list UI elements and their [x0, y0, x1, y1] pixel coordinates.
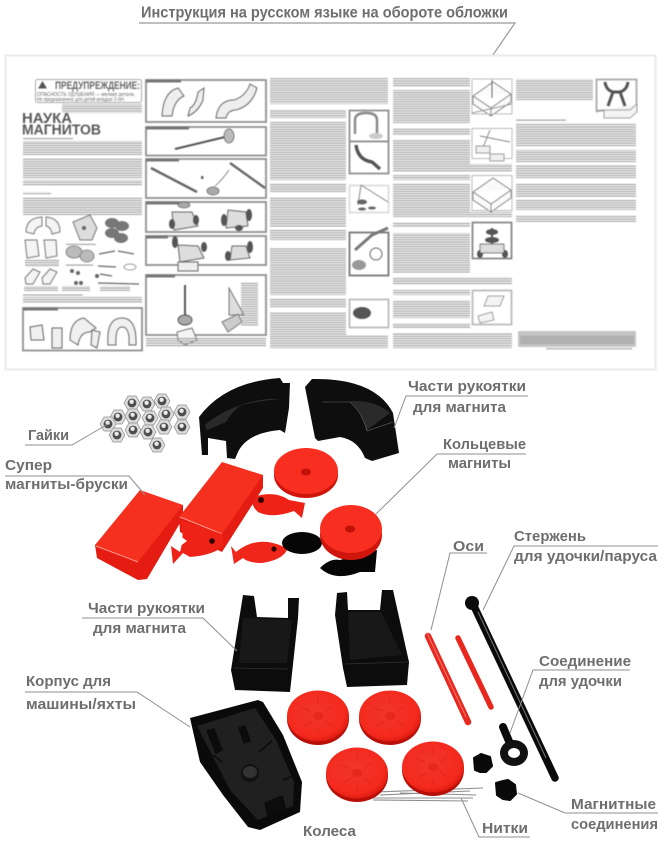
parts diagram [24, 215, 139, 291]
warning box: ПРЕДУПРЕЖДЕНИЕ: [55, 80, 140, 92]
label: handle parts top: Части рукоятки [408, 379, 526, 395]
label: axles [431, 539, 487, 630]
label: rod connector: для удочки [539, 674, 622, 690]
icon: red fish behind the bar [252, 494, 305, 518]
label: bar magnets: магниты-бруски [5, 477, 128, 493]
icon: nuts [100, 394, 190, 452]
column 1 text [23, 137, 142, 303]
label: axles: Оси [453, 539, 484, 555]
icon: black curved handle left [199, 378, 290, 459]
label: hull: Корпус для [26, 674, 111, 690]
label: threads [461, 798, 530, 837]
label: rod: Стержень [514, 529, 586, 545]
icon: threads [373, 788, 483, 801]
label: bar magnets: Супер [5, 458, 52, 474]
label: magnetic connectors: Магнитные [571, 797, 656, 813]
label: handle parts top: для магнита [413, 400, 507, 416]
assembly panel [23, 308, 142, 350]
icon: red bar magnets [95, 462, 263, 580]
warning note [62, 104, 142, 113]
label: wheels: Колеса [303, 824, 357, 840]
icon: red ring magnet upper [274, 448, 338, 498]
copyright box [518, 331, 636, 349]
column 3 text [270, 78, 388, 348]
label: handle parts top [394, 379, 528, 428]
sheet heading: МАГНИТОВ [22, 122, 101, 138]
label: rod: для удочки/паруса [514, 549, 658, 565]
icon: black rod [465, 596, 555, 778]
column 5 figure [596, 80, 637, 118]
label: handle parts lower [82, 601, 237, 651]
label: nuts: Гайки [28, 428, 69, 444]
column 4 figures [472, 79, 512, 324]
sheet heading: НАУКА [22, 111, 73, 127]
column 3 figures [350, 110, 388, 328]
warning box [36, 80, 142, 103]
icon: black box left [231, 595, 299, 692]
label: nuts [25, 424, 108, 445]
step panels [146, 80, 266, 345]
icon: black fish shapes [282, 532, 377, 576]
label: rod [483, 529, 658, 610]
title: instruction note: Инструкция на русском языке на обороте обложки [141, 4, 508, 22]
label: ring magnets: магниты [448, 456, 511, 472]
label: handle parts lower: для магнита [93, 621, 187, 637]
panel: instruction sheet [6, 56, 656, 370]
label: hull [25, 674, 190, 727]
icon: magnetic connectors [474, 754, 516, 800]
label: magnetic connectors [518, 793, 658, 833]
column 5 text [516, 79, 636, 222]
label: bar magnets [5, 458, 145, 495]
label: handle parts lower: Части рукоятки [88, 601, 205, 617]
label: threads: Нитки [482, 821, 528, 837]
label: magnetic connectors: соединения [571, 817, 658, 833]
icon: red ring magnet lower [320, 505, 382, 560]
label: ring magnets: Кольцевые [443, 437, 526, 453]
label: hull: машины/яхты [26, 697, 136, 713]
column 4 text [393, 78, 512, 348]
icon: wheels [287, 690, 464, 802]
icon: red fish pair [171, 520, 287, 564]
label: rod connector: Соединение [539, 654, 631, 670]
warning box: Не предназначено для детей младше 3 лет. [37, 96, 125, 103]
title: instruction note [139, 4, 515, 62]
icon: red axles [427, 633, 491, 722]
column 2 footer text [146, 338, 266, 347]
icon: black box right [335, 590, 409, 687]
icon: black curved handle right [305, 379, 399, 461]
label: rod connector [510, 654, 631, 733]
warning box: ОПАСНОСТЬ УДУШЕНИЯ — мелкие детали. [37, 92, 135, 98]
label: ring magnets [376, 437, 526, 514]
icon: car hull [190, 700, 302, 830]
icon: rod connector [500, 727, 528, 766]
